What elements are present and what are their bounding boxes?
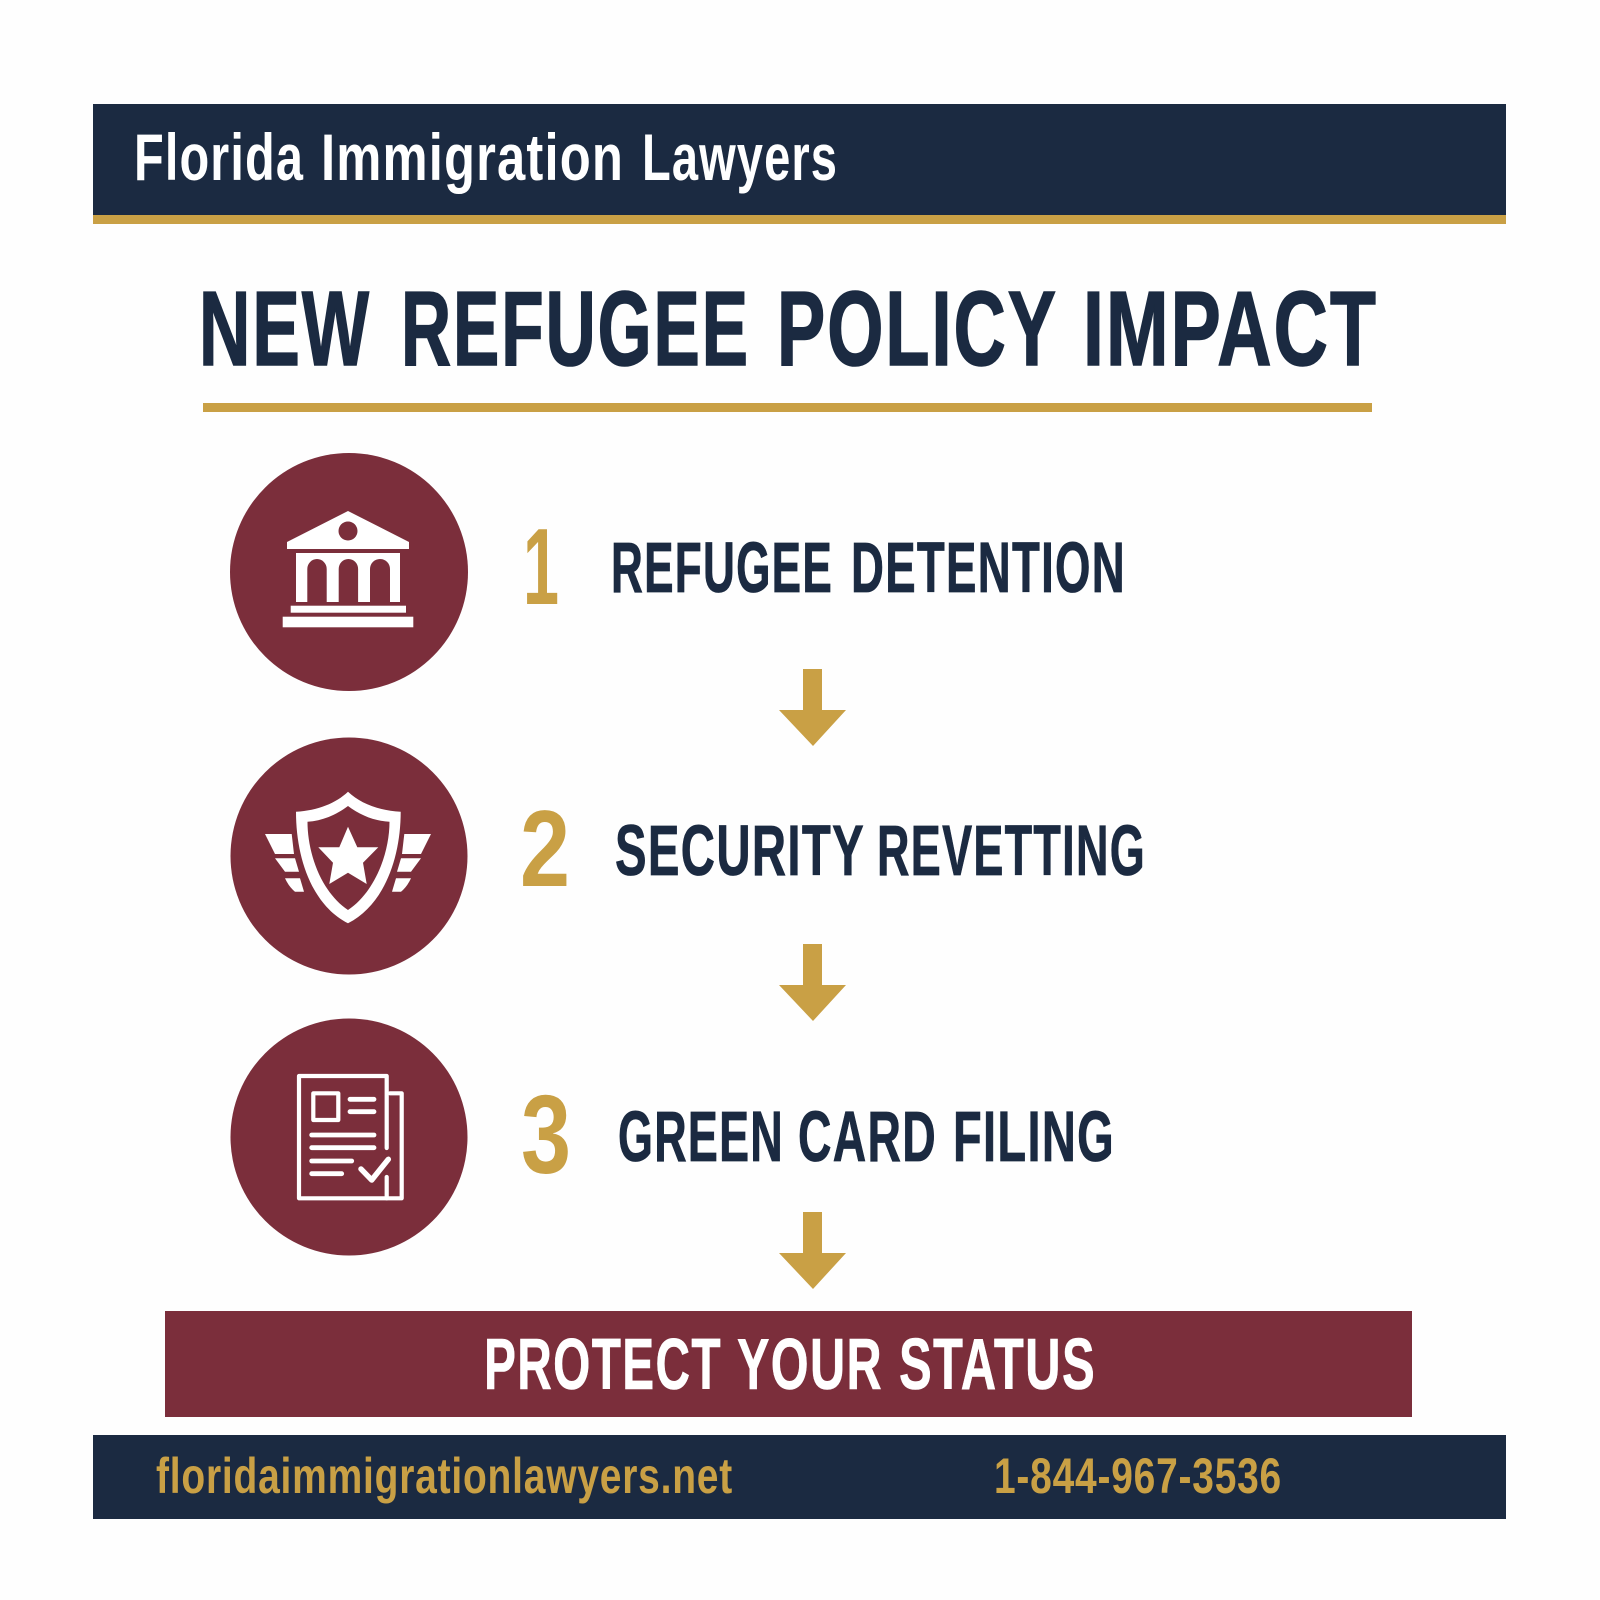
main title: NEW [199,270,371,388]
step number 3: 3 [521,1073,571,1197]
step label: REFUGEE [611,529,833,608]
step 1: refugee detention [230,453,1126,691]
icon: courthouse [230,453,468,691]
step label [611,529,1126,608]
header firm name: Immigration [321,120,624,194]
header firm name [134,120,838,194]
title underline [203,403,1372,412]
header banner [93,104,1506,224]
phone number: 1-844-967-3536 [994,1448,1282,1504]
icon: shield with star and wings [230,738,468,974]
step label: FILING [953,1098,1115,1177]
website: floridaimmigrationlawyers.net [156,1448,733,1504]
call to action text: PROTECT [484,1325,722,1405]
main title: POLICY [777,270,1058,388]
arrow 2 [779,944,846,1021]
main title [199,270,1378,388]
main title: IMPACT [1083,270,1378,388]
call to action text: STATUS [899,1325,1096,1405]
step number 1: 1 [523,506,559,628]
arrow 1 [779,669,846,746]
step label: GREEN [618,1098,784,1177]
call to action text: YOUR [737,1325,883,1405]
call to action banner [165,1311,1412,1417]
step label [618,1098,1115,1177]
header firm name: Lawyers [642,120,838,194]
step label: REVETTING [877,812,1146,891]
step label: CARD [798,1098,937,1177]
call to action text [484,1325,1096,1405]
step label: SECURITY [615,812,865,891]
step 2: security revetting [230,738,1146,974]
footer banner [93,1435,1506,1519]
step label: DETENTION [851,529,1126,608]
main title: REFUGEE [401,270,750,388]
arrow 3 [779,1212,846,1289]
header firm name: Florida [134,120,304,194]
step 3: green card filing [230,1018,1115,1256]
step number 2: 2 [520,788,570,910]
icon: document with checkmark [230,1018,468,1256]
